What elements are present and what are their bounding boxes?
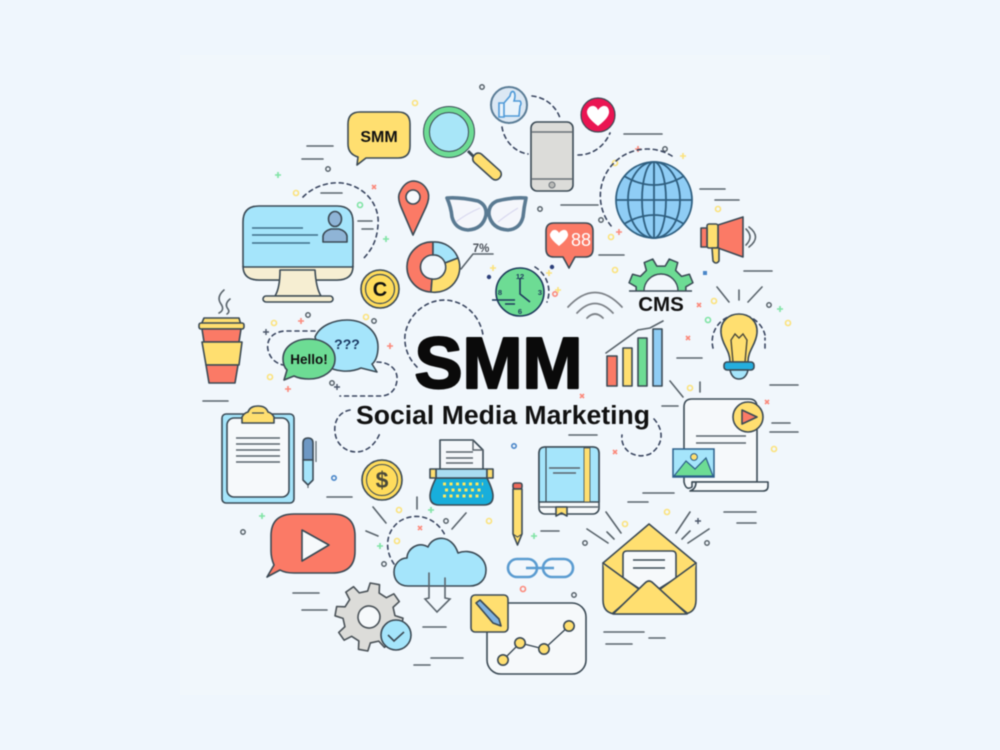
icon: chat bubbles — [283, 320, 378, 380]
icon: desktop monitor — [243, 206, 353, 302]
icon: picture — [673, 449, 714, 477]
icon: coffee cup — [199, 290, 244, 383]
icon: CMS gear — [628, 258, 694, 312]
icon: likes notification — [546, 223, 593, 268]
icon: settings gear — [330, 578, 411, 656]
icon: user avatar — [323, 212, 347, 242]
icon: clock — [492, 268, 544, 316]
subtitle: Social Media Marketing: Social Media Marketing — [356, 402, 650, 430]
icon: smartphone — [531, 122, 573, 191]
icon: CMS gear: CMS — [638, 293, 684, 316]
chart: donut 7%: 7% — [473, 243, 489, 255]
icon: heart circle — [581, 98, 615, 132]
icon: document with media — [673, 399, 768, 491]
icon: magnifying glass — [424, 106, 503, 182]
icon: pencil note — [471, 595, 508, 632]
icon: open envelope — [603, 524, 696, 614]
icon: location pin — [399, 181, 429, 235]
icon: dollar coin — [362, 460, 402, 500]
icon: clipboard — [222, 406, 294, 503]
chart: rising bars — [606, 321, 663, 386]
icon: chat bubbles: ??? — [334, 336, 360, 352]
icon: SMM speech bubble — [348, 112, 410, 165]
icon: notebook — [539, 447, 599, 516]
title: SMM: SMM — [414, 324, 582, 404]
icon: clock: 12 — [516, 272, 524, 281]
icon: light bulb — [721, 314, 757, 379]
icon: typewriter — [430, 440, 493, 505]
chart: donut 7% — [407, 242, 493, 292]
icon: clock: 3 — [538, 288, 542, 297]
icon: megaphone — [701, 217, 756, 263]
icon: thumbs up circle — [491, 87, 527, 123]
chart: line graph card — [471, 595, 586, 674]
icon: wifi arcs — [568, 292, 622, 318]
icon: video play bubble — [267, 514, 355, 577]
icon: likes notification: 88 — [571, 230, 591, 250]
icon: copyright coin — [361, 270, 399, 308]
icon: clock: 6 — [518, 307, 522, 316]
icon: pen — [303, 438, 316, 488]
icon: SMM speech bubble: SMM — [360, 129, 398, 146]
icon: chat bubbles: Hello! — [290, 352, 328, 367]
icon: pencil — [513, 483, 522, 545]
icon: cloud download — [394, 538, 486, 612]
icon: copyright coin: C — [373, 279, 387, 301]
icon: clock: 8 — [498, 288, 502, 297]
icon: glasses — [447, 198, 526, 230]
icon: globe — [616, 162, 692, 238]
icon: chain link — [508, 559, 573, 577]
icon: dollar coin: $ — [376, 467, 389, 493]
